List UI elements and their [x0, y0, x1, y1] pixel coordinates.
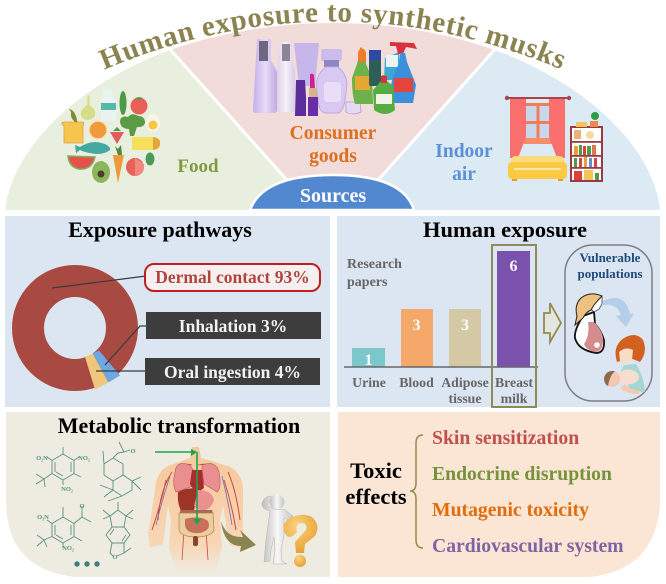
effect: cardiovascular system: Cardiovascular system	[432, 535, 624, 557]
bar chart: Blood	[399, 375, 434, 390]
panel: exposure pathways	[5, 216, 330, 407]
icon: human body with organs	[148, 447, 243, 574]
axis caption: papers	[347, 275, 388, 290]
indoor air label: Indoor	[435, 141, 493, 162]
molecule: musk ketone: O	[79, 503, 85, 510]
food label: Food	[177, 156, 219, 177]
axis caption: Research	[347, 257, 402, 272]
callout: dermal contact: Dermal contact 93%	[155, 267, 310, 287]
sources label: Sources	[300, 185, 366, 207]
molecule: musk xylene: O₂N	[36, 455, 48, 462]
heading: effects	[345, 484, 407, 509]
heading: Human exposure	[423, 217, 587, 242]
heading: Toxic	[350, 458, 402, 483]
vulnerable populations box	[565, 245, 652, 401]
consumer goods sector	[170, 23, 495, 178]
arrow heads	[191, 449, 201, 525]
icon: mother and baby	[604, 335, 645, 394]
molecule: galaxolide	[103, 502, 133, 561]
molecule: galaxolide: O	[112, 554, 118, 561]
icon: curved arrow	[603, 298, 634, 327]
bar chart: 1	[364, 352, 372, 369]
effect: skin sensitization: Skin sensitization	[432, 427, 579, 449]
molecule: musk xylene: NO₂	[61, 486, 73, 493]
effect: mutagenic toxicity: Mutagenic toxicity	[432, 499, 589, 521]
callout: oral ingestion: Oral ingestion 4%	[164, 362, 301, 382]
bar chart: tissue	[449, 391, 481, 406]
molecule: musk xylene	[36, 447, 90, 493]
heading: Exposure pathways	[68, 217, 252, 242]
molecule: musk xylene: NO₂	[78, 455, 90, 462]
consumer products	[253, 39, 417, 116]
curved arrow	[221, 521, 256, 552]
molecule: musk ketone: O₂N	[37, 514, 49, 521]
bar chart: 3	[461, 317, 469, 334]
callout: oral ingestion	[96, 358, 320, 385]
effect: endocrine disruption: Endocrine disruption	[432, 463, 612, 485]
callout: dermal contact	[52, 264, 320, 291]
bar chart	[344, 251, 538, 406]
food icons	[62, 89, 160, 183]
molecule: musk ketone: NO₂	[62, 545, 74, 552]
indoor air sector	[380, 50, 660, 210]
arrow	[544, 303, 561, 342]
icon: pregnant woman	[575, 294, 604, 353]
food sector	[5, 50, 285, 210]
bar chart: Urine	[352, 375, 386, 390]
sector divider: right	[379, 47, 497, 179]
panel: human exposure	[337, 216, 660, 407]
heading: Metabolic transformation	[58, 413, 300, 438]
bar chart: Adipose	[441, 375, 489, 390]
arrow: green route	[155, 452, 197, 521]
molecule: tonalide: O	[130, 448, 136, 455]
callout: inhalation	[105, 312, 321, 365]
consumer goods label line 2: goods	[309, 146, 357, 167]
vulnerable populations box: populations	[577, 266, 643, 281]
ellipsis dots	[74, 561, 100, 567]
panel: sources fan	[5, 23, 660, 210]
panel: metabolic transformation	[6, 412, 330, 577]
room illustration	[505, 96, 602, 181]
breast milk highlight	[492, 245, 536, 407]
consumer goods label: Consumer	[290, 123, 377, 144]
bar chart: Breast	[495, 375, 533, 390]
sector divider: left	[168, 47, 286, 179]
sources badge	[250, 175, 414, 210]
indoor air label line 2: air	[452, 164, 476, 185]
bar chart: milk	[501, 391, 528, 406]
vulnerable populations box: Vulnerable	[580, 250, 641, 265]
donut chart	[28, 281, 122, 390]
bar chart: 3	[412, 317, 420, 334]
brace	[410, 435, 423, 548]
molecule: musk ketone	[37, 503, 91, 552]
icon: thinking figure with question mark	[262, 494, 317, 567]
bar chart: 6	[510, 258, 518, 275]
molecule: tonalide	[100, 442, 141, 501]
callout: inhalation: Inhalation 3%	[179, 316, 287, 336]
panel: toxic effects	[338, 412, 660, 577]
